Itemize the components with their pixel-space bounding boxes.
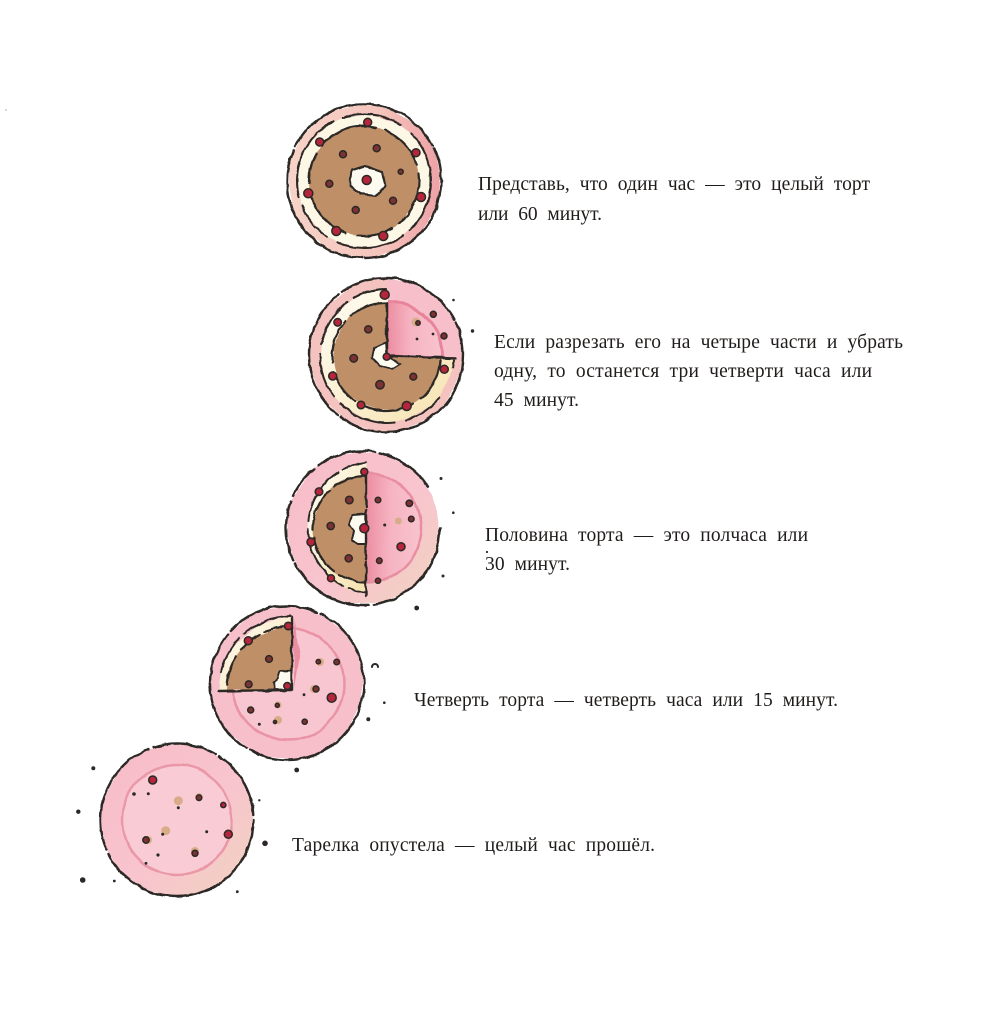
text: whole cake: Представь, что один час — это целый торт [478, 174, 870, 195]
leftover spots [132, 776, 232, 865]
plate [287, 452, 439, 604]
crumbs [452, 299, 474, 333]
centre hole [349, 514, 366, 544]
outlines [309, 278, 463, 432]
berries [329, 290, 448, 410]
text: quarter cake: Четверть торта — четверть часа или 15 минут. [414, 690, 838, 711]
outline [100, 744, 254, 896]
plate [310, 279, 462, 431]
cream layer [308, 462, 366, 593]
cream layer [298, 115, 430, 247]
text: three quarters [494, 332, 903, 411]
outlines [286, 451, 440, 605]
empty quarter [387, 301, 442, 358]
cream layer [219, 618, 292, 690]
berries [244, 622, 340, 726]
empty quarter outer [387, 279, 463, 358]
chocolate top [309, 126, 419, 236]
text: three quarters: 45 минут. [494, 390, 579, 411]
text: three quarters: одну, то останется три четверти часа или [494, 361, 872, 382]
crumbs [414, 477, 488, 610]
text: empty plate: Тарелка опустела — целый час прошёл. [292, 835, 655, 856]
shade along the cut [294, 620, 300, 688]
centre hole [273, 670, 292, 689]
panel: empty plate [76, 744, 268, 896]
crumbs [294, 664, 386, 772]
centre hole [350, 166, 385, 196]
panel: three quarters, 45 minutes [309, 278, 474, 432]
panel: quarter cake, 15 minutes [210, 606, 386, 772]
berries [307, 468, 414, 583]
outlines [287, 104, 441, 258]
text: half cake: 30 минут. [485, 554, 570, 575]
centre hole [372, 343, 400, 369]
inner ring [232, 628, 344, 740]
plate [211, 607, 363, 759]
chocolate top [226, 628, 292, 690]
text: half cake: Половина торта — это полчаса или [485, 525, 808, 546]
crumbs [76, 766, 268, 893]
chocolate top [333, 302, 441, 410]
berries [304, 118, 426, 240]
outlines [210, 606, 364, 760]
chocolate top [313, 476, 366, 582]
text: whole cake [478, 174, 870, 225]
panel: whole cake, 60 minutes [287, 104, 441, 258]
empty half ring [366, 473, 421, 583]
text: half cake [485, 525, 808, 575]
inner ring [122, 765, 232, 875]
text: whole cake: или 60 минут. [478, 204, 602, 225]
cream layer [321, 290, 453, 422]
panel: half cake, 30 minutes [286, 451, 488, 610]
plate [101, 744, 253, 896]
plate [288, 105, 440, 257]
text: three quarters: Если разрезать его на четыре части и убрать [494, 332, 903, 353]
